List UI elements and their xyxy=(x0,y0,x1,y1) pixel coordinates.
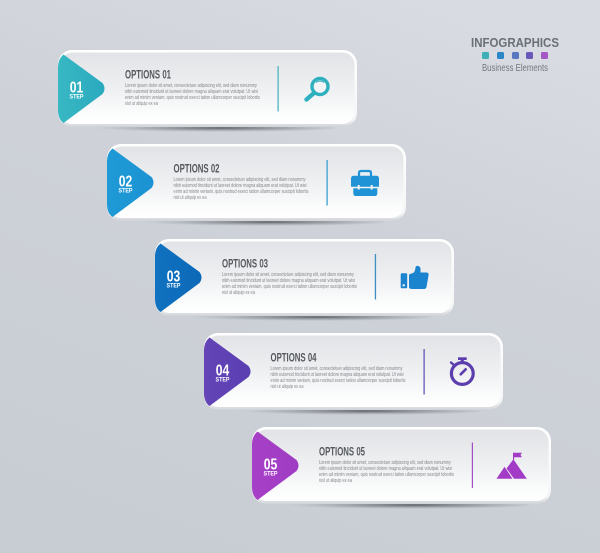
text block 5: nibh euismod tincidunt ut laoreet dolore magna aliquam erat volutpat. Ut wisi xyxy=(319,466,452,472)
heading: infographics business elements: Business Elements xyxy=(482,62,548,74)
step badge 3 xyxy=(155,244,202,312)
text block 2: nisl ut aliquip ex ea xyxy=(174,195,207,201)
text block 5: nisl ut aliquip ex ea xyxy=(319,478,353,484)
text block 1 xyxy=(125,68,260,107)
text block 2: Lorem ipsum dolor sit amet, consectetuer adipiscing elit, sed diam nonummy xyxy=(174,177,306,183)
panel: option 3 xyxy=(155,239,454,321)
step badge 5: 05 xyxy=(264,456,278,473)
icon: magnifier xyxy=(306,78,328,100)
icon: thumbs up xyxy=(401,266,429,289)
text block 1: nisl ut aliquip ex ea xyxy=(125,101,159,107)
text block 2: enim ad minim veniam, quis nostrud exerci tation ullamcorper suscipit lobortis xyxy=(174,189,309,195)
step badge 1: 01 xyxy=(70,79,84,96)
text block 1: Lorem ipsum dolor sit amet, consectetuer adipiscing elit, sed diam nonummy xyxy=(125,83,257,89)
text block 4: nisl ut aliquip ex ea xyxy=(270,384,304,390)
text block 3 xyxy=(222,257,357,296)
step badge 2 xyxy=(107,148,154,217)
text block 3: nibh euismod tincidunt ut laoreet dolore magna aliquam erat volutpat. Ut wisi xyxy=(222,278,355,284)
step badge 4 xyxy=(204,338,250,406)
text block 4: OPTIONS 04 xyxy=(270,351,317,364)
text block 3: OPTIONS 03 xyxy=(222,257,268,270)
text block 4: nibh euismod tincidunt ut laoreet dolore magna aliquam erat volutpat. Ut wisi xyxy=(270,372,404,378)
text block 5: Lorem ipsum dolor sit amet, consectetuer adipiscing elit, sed diam nonummy xyxy=(319,460,451,466)
text block 1: enim ad minim veniam, quis nostrud exerci tation ullamcorper suscipit lobortis xyxy=(125,95,260,101)
heading: infographics business elements: INFOGRAPHICS xyxy=(471,35,559,50)
text block 4 xyxy=(270,351,406,390)
step badge 5 xyxy=(252,432,298,500)
step badge 3: STEP xyxy=(166,282,181,289)
step badge 4: 04 xyxy=(216,362,230,379)
step badge 3: 03 xyxy=(167,268,181,285)
text block 2: OPTIONS 02 xyxy=(174,162,220,175)
panel: option 4 xyxy=(204,333,503,415)
text block 5: enim ad minim veniam, quis nostrud exerci tation ullamcorper suscipit lobortis xyxy=(319,472,454,478)
text block 3: nisl ut aliquip ex ea xyxy=(222,290,256,296)
icon: briefcase xyxy=(351,171,379,196)
text block 5 xyxy=(319,445,454,484)
step badge 4: STEP xyxy=(216,376,230,383)
panel: option 5 xyxy=(252,427,551,509)
text block 4: enim ad minim veniam, quis nostrud exerci tation ullamcorper suscipit lobortis xyxy=(270,378,406,384)
heading: infographics business elements xyxy=(471,35,559,74)
step badge 1: STEP xyxy=(70,93,84,100)
icon: mountain with flag xyxy=(496,453,527,479)
icon: stopwatch xyxy=(451,357,473,384)
panel: option 2 xyxy=(107,144,406,226)
text block 2 xyxy=(174,162,309,201)
text block 2: nibh euismod tincidunt ut laoreet dolore magna aliquam erat volutpat. Ut wisi xyxy=(174,183,306,189)
step badge 2: STEP xyxy=(118,187,133,194)
text block 1: nibh euismod tincidunt ut laoreet dolore magna aliquam erat volutpat. Ut wisi xyxy=(125,89,258,95)
panel: option 1 xyxy=(58,50,357,132)
text block 1: OPTIONS 01 xyxy=(125,68,171,81)
step badge 1 xyxy=(58,54,104,123)
step badge 2: 02 xyxy=(119,173,132,190)
text block 4: Lorem ipsum dolor sit amet, consectetuer adipiscing elit, sed diam nonummy xyxy=(270,366,403,372)
text block 5: OPTIONS 05 xyxy=(319,445,365,458)
text block 3: Lorem ipsum dolor sit amet, consectetuer adipiscing elit, sed diam nonummy xyxy=(222,272,354,278)
step badge 5: STEP xyxy=(264,470,278,477)
text block 3: enim ad minim veniam, quis nostrud exerci tation ullamcorper suscipit lobortis xyxy=(222,284,357,290)
